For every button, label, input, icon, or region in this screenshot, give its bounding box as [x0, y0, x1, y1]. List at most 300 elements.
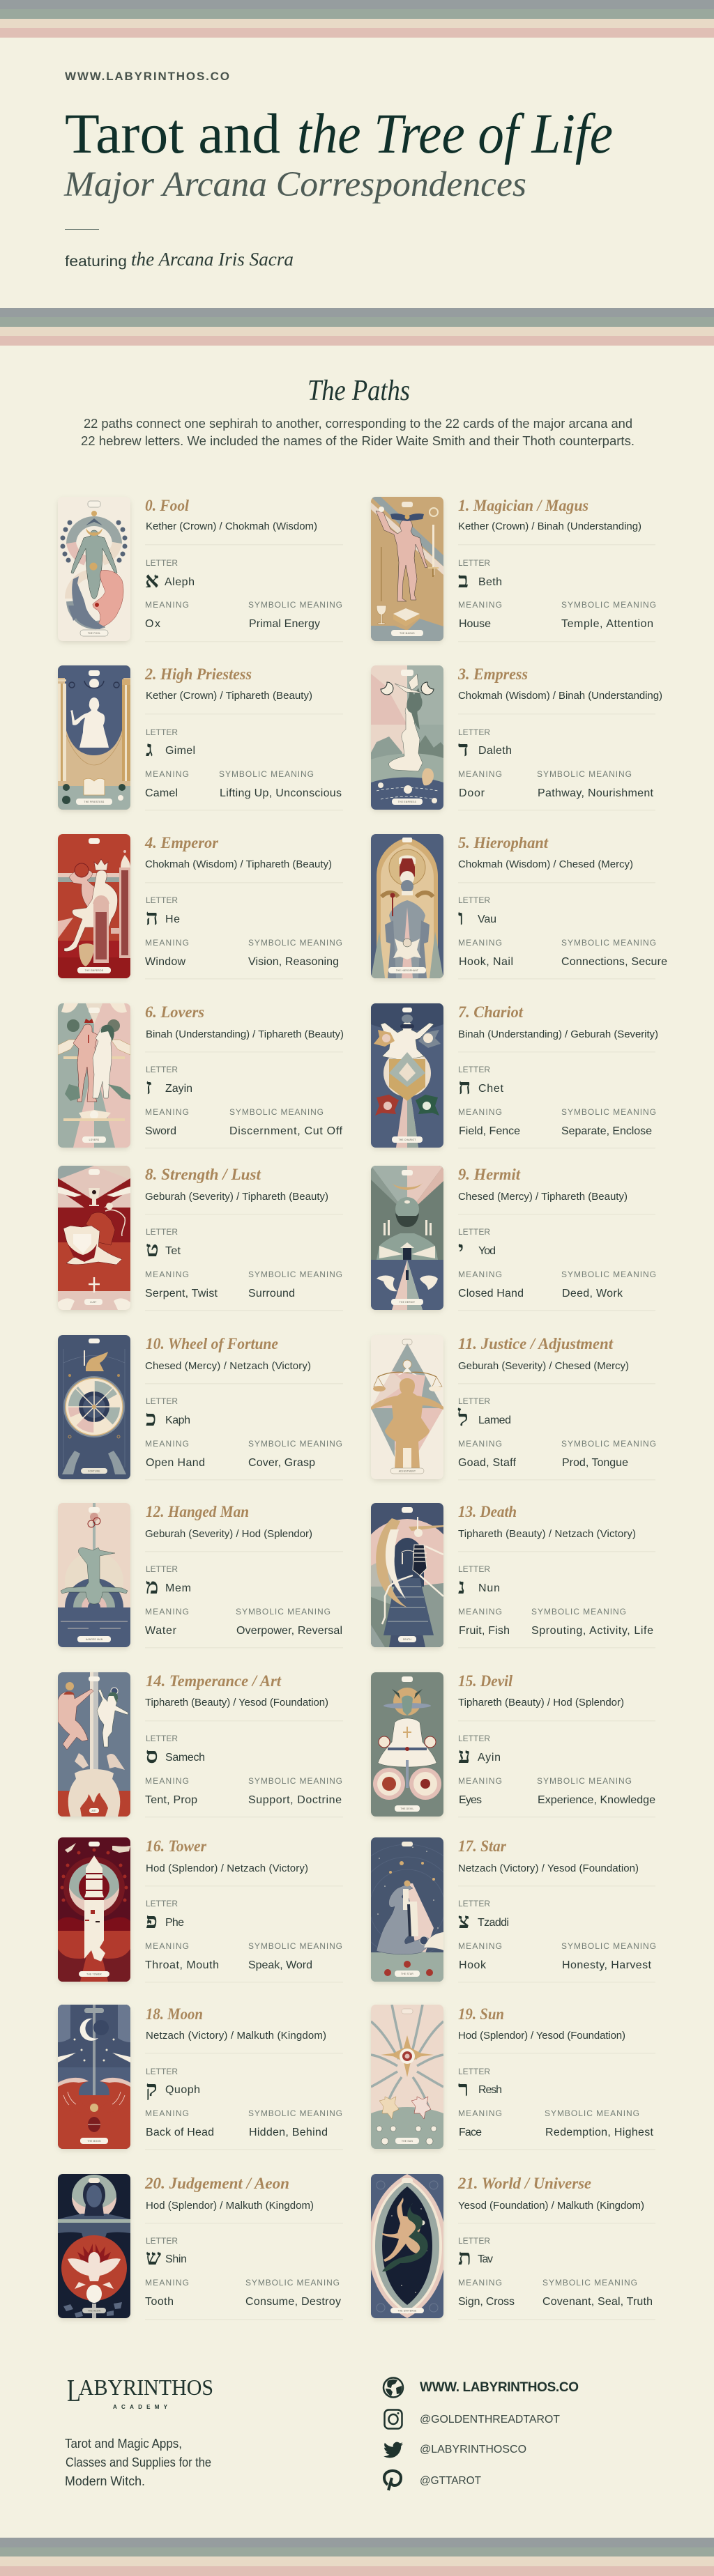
meaning: Ox — [145, 618, 160, 630]
logo: Labyrinthos Academy: L — [67, 2373, 81, 2408]
letter: LETTER — [146, 2236, 178, 2246]
symbolic meaning: SYMBOLIC MEANING — [248, 1439, 342, 1449]
letter: Kaph — [165, 1414, 190, 1426]
sephirot pair: Binah (Understanding) / Tiphareth (Beauty) — [146, 1028, 344, 1040]
symbolic meaning — [248, 1270, 342, 1299]
card title: 10. Wheel of Fortune — [146, 1335, 278, 1352]
symbolic meaning: SYMBOLIC MEANING — [561, 1107, 656, 1117]
intro paragraph — [81, 417, 635, 448]
card art: The Lovers: LOVERS — [89, 1139, 99, 1141]
symbolic meaning: Support, Doctrine — [248, 1794, 342, 1806]
meaning: Door — [459, 787, 485, 799]
letter: ק — [146, 2076, 158, 2101]
panel: 8. Strength / Lust — [58, 1166, 343, 1311]
meaning: MEANING — [145, 2278, 189, 2288]
card title: 21. World / Universe — [457, 2175, 591, 2192]
meaning: Field, Fence — [459, 1125, 520, 1137]
panel: 17. Star — [344, 1837, 656, 1983]
panel: 5. Hierophant — [371, 834, 667, 980]
meaning: MEANING — [145, 1941, 189, 1951]
meaning: Sign, Cross — [458, 2296, 515, 2308]
symbolic meaning: SYMBOLIC MEANING — [248, 1776, 342, 1786]
meaning: Tooth — [145, 2296, 174, 2308]
meaning: MEANING — [458, 2108, 502, 2118]
card title: 2. High Priestess — [144, 665, 252, 683]
meaning: MEANING — [145, 1607, 189, 1617]
card art: The Empress: THE EMPRESS — [398, 801, 416, 803]
letter: צ — [458, 1908, 469, 1933]
symbolic meaning: Consume, Destroy — [245, 2296, 341, 2308]
letter — [146, 1734, 205, 1768]
panel: 3. Empress — [371, 665, 662, 811]
tagline: Tarot and Magic Apps, — [65, 2437, 182, 2451]
meaning: MEANING — [458, 1776, 502, 1786]
card title: 18. Moon — [146, 2005, 203, 2023]
letter: ו — [458, 905, 464, 930]
meaning — [458, 1270, 524, 1299]
letter — [145, 558, 195, 592]
meaning — [458, 1439, 517, 1469]
tagline: Classes and Supplies for the — [66, 2455, 211, 2469]
card art: The Hanged Man: HANGED MAN — [86, 1638, 103, 1641]
meaning — [145, 1107, 189, 1137]
letter: ח — [458, 1074, 471, 1099]
symbolic meaning — [531, 1607, 653, 1637]
letter: LETTER — [146, 1227, 178, 1237]
letter — [146, 1899, 184, 1933]
letter — [457, 1396, 511, 1430]
letter — [458, 2067, 502, 2101]
symbolic meaning: SYMBOLIC MEANING — [561, 1270, 656, 1279]
letter: Daleth — [478, 745, 512, 757]
sephirot pair: Chesed (Mercy) / Tiphareth (Beauty) — [458, 1191, 628, 1203]
letter: כ — [146, 1406, 156, 1430]
letter: LETTER — [458, 1065, 490, 1074]
letter: Tet — [165, 1245, 181, 1257]
symbolic meaning: Discernment, Cut Off — [229, 1125, 343, 1137]
letter: Nun — [478, 1582, 500, 1594]
letter — [146, 895, 180, 930]
card art: The Devil: THE DEVIL — [400, 1807, 414, 1810]
intro paragraph: 22 hebrew letters. We included the names of the Rider Waite Smith and their Thoth counterparts. — [81, 434, 635, 448]
symbolic meaning — [248, 1439, 342, 1469]
card art: The Chariot — [371, 1003, 443, 1149]
meaning: Goad, Staff — [458, 1457, 517, 1469]
card art: The World — [368, 2174, 446, 2320]
card art: The Emperor — [58, 834, 130, 980]
card art: The Emperor: THE EMPEROR — [85, 969, 104, 972]
meaning — [145, 2108, 214, 2138]
meaning: MEANING — [145, 938, 189, 948]
panel: 6. Lovers — [58, 1003, 344, 1149]
meaning: Hook — [459, 1959, 487, 1971]
card art: Temperance — [58, 1672, 130, 1818]
meaning: Face — [459, 2127, 482, 2138]
card title: 4. Emperor — [144, 834, 219, 851]
meaning: Back of Head — [146, 2127, 214, 2138]
letter: ר — [458, 2076, 469, 2101]
meaning: MEANING — [458, 938, 502, 948]
meaning — [145, 769, 189, 799]
letter: LETTER — [458, 2236, 490, 2246]
card art: The Chariot: THE CHARIOT — [399, 1139, 416, 1141]
meaning — [145, 938, 189, 968]
site url: WWW.LABYRINTHOS.CO — [65, 70, 229, 83]
symbolic meaning — [561, 1941, 656, 1971]
symbolic meaning: Pathway, Nourishment — [538, 787, 654, 799]
sephirot pair: Tiphareth (Beauty) / Netzach (Victory) — [458, 1528, 636, 1540]
card art: The Hermit — [371, 1166, 443, 1311]
letter: Yod — [478, 1245, 496, 1257]
card art: The Fool: THE FOOL — [88, 632, 100, 635]
title: the Tree of Life — [297, 102, 613, 165]
meaning: MEANING — [458, 1607, 502, 1617]
card art: The Hanged Man — [58, 1503, 130, 1649]
tagline — [65, 2437, 211, 2488]
symbolic meaning — [245, 2278, 341, 2308]
meaning: MEANING — [145, 1776, 189, 1786]
symbolic meaning — [537, 769, 654, 799]
meaning: MEANING — [145, 600, 189, 610]
sephirot pair: Yesod (Foundation) / Malkuth (Kingdom) — [458, 2200, 644, 2212]
card art: Justice: ADJUSTMENT — [399, 1470, 416, 1473]
sephirot pair: Geburah (Severity) / Hod (Splendor) — [145, 1528, 312, 1540]
card title: 13. Death — [458, 1503, 517, 1520]
symbolic meaning: Speak, Word — [248, 1959, 312, 1971]
meaning: Closed Hand — [458, 1288, 524, 1299]
meaning: Serpent, Twist — [145, 1288, 218, 1299]
letter — [458, 1899, 509, 1933]
symbolic meaning: SYMBOLIC MEANING — [229, 1107, 324, 1117]
symbolic meaning: Temple, Attention — [561, 618, 653, 630]
card art: The Tower — [58, 1837, 130, 1983]
symbolic meaning: SYMBOLIC MEANING — [537, 769, 632, 779]
sephirot pair: Hod (Splendor) / Malkuth (Kingdom) — [146, 2200, 314, 2212]
letter — [458, 727, 512, 761]
meaning: MEANING — [458, 1270, 502, 1279]
letter: LETTER — [458, 1734, 490, 1743]
letter: Tav — [478, 2253, 493, 2265]
letter: LETTER — [458, 1396, 490, 1406]
meaning — [458, 600, 502, 630]
letter: LETTER — [146, 1564, 178, 1574]
letter: ד — [458, 736, 469, 761]
letter: Chet — [478, 1083, 504, 1095]
symbolic meaning: SYMBOLIC MEANING — [561, 938, 656, 948]
sephirot pair: Chokmah (Wisdom) / Chesed (Mercy) — [458, 858, 633, 870]
letter — [146, 1396, 190, 1430]
letter: LETTER — [458, 727, 490, 737]
letter: LETTER — [146, 727, 178, 737]
symbolic meaning — [561, 1107, 656, 1137]
meaning: Hook, Nail — [459, 956, 513, 968]
symbolic meaning: SYMBOLIC MEANING — [236, 1607, 331, 1617]
card art: The Sun: THE SUN — [402, 2140, 413, 2143]
meaning — [145, 1607, 189, 1637]
letter: Lamed — [478, 1414, 511, 1426]
sephirot pair: Hod (Splendor) / Netzach (Victory) — [146, 1862, 308, 1874]
meaning: MEANING — [458, 600, 502, 610]
symbolic meaning: SYMBOLIC MEANING — [248, 938, 342, 948]
letter: LETTER — [146, 895, 178, 905]
card art: The Moon — [58, 2005, 130, 2150]
card art: Death: DEATH — [403, 1638, 411, 1641]
symbolic meaning: Hidden, Behind — [249, 2127, 328, 2138]
card art: Strength — [58, 1166, 130, 1311]
letter — [146, 727, 195, 761]
sephirot pair: Binah (Understanding) / Geburah (Severity) — [458, 1028, 658, 1040]
meaning: Water — [145, 1625, 177, 1637]
card title: 20. Judgement / Aeon — [144, 2175, 289, 2192]
icon: pinterest — [384, 2471, 401, 2490]
letter: Shin — [165, 2253, 187, 2265]
card art: Judgement — [58, 2174, 130, 2320]
meaning: MEANING — [145, 1107, 189, 1117]
symbolic meaning — [561, 600, 656, 630]
symbolic meaning: SYMBOLIC MEANING — [561, 600, 656, 610]
letter: נ — [458, 1574, 465, 1598]
sephirot pair: Chokmah (Wisdom) / Binah (Understanding) — [458, 690, 662, 702]
letter: LETTER — [458, 1227, 490, 1237]
letter: LETTER — [458, 1899, 490, 1908]
letter: מ — [146, 1574, 158, 1598]
letter: ב — [458, 568, 469, 592]
meaning: MEANING — [458, 769, 502, 779]
sephirot pair: Kether (Crown) / Tiphareth (Beauty) — [146, 690, 312, 702]
letter — [458, 558, 502, 592]
symbolic meaning: SYMBOLIC MEANING — [561, 1439, 656, 1449]
meaning: House — [459, 618, 491, 630]
symbolic meaning: Surround — [248, 1288, 295, 1299]
instagram handle: @GOLDENTHREADTAROT — [420, 2414, 560, 2425]
letter: ע — [458, 1743, 471, 1768]
symbolic meaning: SYMBOLIC MEANING — [537, 1776, 632, 1786]
card title: 1. Magician / Magus — [458, 497, 588, 514]
card art: The Magician — [371, 497, 443, 642]
sephirot pair: Geburah (Severity) / Chesed (Mercy) — [458, 1360, 629, 1372]
letter: Quoph — [165, 2084, 200, 2096]
card title: 9. Hermit — [458, 1166, 521, 1183]
logo: Labyrinthos Academy: ABYRINTHOS — [79, 2375, 213, 2400]
meaning — [458, 2108, 502, 2138]
card art: Death — [370, 1503, 445, 1650]
meaning — [145, 600, 189, 630]
letter — [458, 1227, 496, 1261]
website: WWW. LABYRINTHOS.CO — [420, 2380, 579, 2395]
card title: 15. Devil — [458, 1672, 513, 1690]
meaning — [145, 1439, 205, 1469]
meaning — [145, 1270, 218, 1299]
symbolic meaning: Connections, Secure — [561, 956, 667, 968]
card title: 19. Sun — [458, 2005, 504, 2023]
intro paragraph: 22 paths connect one sephirah to another, corresponding to the 22 cards of the major arcana and — [84, 417, 632, 431]
symbolic meaning: SYMBOLIC MEANING — [248, 600, 342, 610]
card art: Wheel of Fortune — [58, 1335, 130, 1481]
card title: 7. Chariot — [458, 1003, 524, 1021]
twitter handle: @LABYRINTHOSCO — [420, 2444, 526, 2455]
symbolic meaning — [537, 1776, 655, 1806]
letter: ט — [146, 1237, 159, 1261]
symbolic meaning: Primal Energy — [249, 618, 320, 630]
symbolic meaning: SYMBOLIC MEANING — [545, 2108, 639, 2118]
symbolic meaning — [542, 2278, 653, 2308]
letter — [146, 1227, 181, 1261]
letter — [458, 2236, 493, 2269]
meaning: MEANING — [458, 1941, 502, 1951]
panel: 19. Sun — [371, 2005, 655, 2150]
meaning: MEANING — [145, 769, 189, 779]
card art: Justice — [371, 1335, 443, 1481]
bottom stripes — [0, 2538, 714, 2576]
card art: The Moon: THE MOON — [87, 2140, 101, 2143]
letter — [146, 2236, 187, 2269]
card art: The Hierophant: THE HIEROPHANT — [396, 969, 418, 972]
letter — [146, 2067, 200, 2101]
letter: LETTER — [458, 895, 490, 905]
letter: LETTER — [146, 558, 178, 568]
letter: Phe — [165, 1917, 184, 1929]
symbolic meaning — [561, 1439, 656, 1469]
panel: 0. Fool — [58, 497, 343, 642]
meaning — [458, 1607, 510, 1637]
letter: Ayin — [478, 1752, 501, 1764]
meaning — [458, 1941, 502, 1971]
card title: 3. Empress — [457, 665, 528, 683]
symbolic meaning: Covenant, Seal, Truth — [542, 2296, 653, 2308]
logo: Labyrinthos Academy — [67, 2373, 213, 2410]
panel: 20. Judgement / Aeon — [58, 2174, 343, 2320]
card title: 11. Justice / Adjustment — [458, 1335, 614, 1352]
meaning: Fruit, Fish — [459, 1625, 510, 1637]
letter: Gimel — [165, 745, 195, 757]
title — [65, 102, 613, 165]
panel: 14. Temperance / Art — [58, 1672, 343, 1818]
card title: 12. Hanged Man — [146, 1503, 249, 1520]
card art: The Devil — [371, 1672, 443, 1818]
letter: פ — [146, 1908, 158, 1933]
letter: LETTER — [146, 1899, 178, 1908]
top stripes — [0, 0, 714, 38]
symbolic meaning: Experience, Knowledge — [538, 1794, 655, 1806]
letter: Samech — [165, 1752, 205, 1764]
card art: The Star — [370, 1837, 445, 1984]
card art: The World: THE UNIVERSE — [397, 2309, 417, 2312]
panel: 21. World / Universe — [368, 2174, 655, 2320]
card art: The Hierophant — [371, 834, 443, 980]
panel: 9. Hermit — [371, 1166, 656, 1311]
sephirot pair: Tiphareth (Beauty) / Hod (Splendor) — [458, 1697, 624, 1709]
sephirot pair: Kether (Crown) / Chokmah (Wisdom) — [146, 520, 317, 532]
symbolic meaning: Cover, Grasp — [248, 1457, 315, 1469]
panel: 10. Wheel of Fortune — [58, 1335, 343, 1481]
sephirot pair: Geburah (Severity) / Tiphareth (Beauty) — [145, 1191, 328, 1203]
symbolic meaning: SYMBOLIC MEANING — [542, 2278, 637, 2288]
symbolic meaning — [219, 769, 342, 799]
letter: ס — [146, 1743, 158, 1768]
meaning: MEANING — [145, 1439, 189, 1449]
panel: 16. Tower — [58, 1837, 343, 1983]
meaning: Open Hand — [146, 1457, 205, 1469]
card art: The High Priestess: THE PRIESTESS — [84, 801, 105, 803]
card art: The Empress — [371, 665, 443, 811]
letter: י — [458, 1237, 464, 1261]
symbolic meaning — [236, 1607, 342, 1637]
panel: 1. Magician / Magus — [371, 497, 656, 642]
panel: 15. Devil — [371, 1672, 655, 1818]
sephirot pair: Netzach (Victory) / Yesod (Foundation) — [458, 1862, 639, 1874]
card art: The Magician: THE MAGUS — [400, 632, 415, 635]
symbolic meaning: SYMBOLIC MEANING — [219, 769, 314, 779]
card art: The Lovers — [58, 1003, 137, 1149]
meaning — [458, 1107, 520, 1137]
meaning — [145, 1776, 197, 1806]
meaning: MEANING — [458, 1439, 502, 1449]
symbolic meaning: SYMBOLIC MEANING — [248, 1941, 342, 1951]
panel: 4. Emperor — [58, 834, 343, 980]
icon: instagram — [385, 2409, 402, 2429]
meaning — [458, 1776, 502, 1806]
subtitle: Major Arcana Correspondences — [63, 165, 526, 204]
letter: ש — [146, 2245, 161, 2269]
featuring line: the Arcana Iris Sacra — [131, 249, 294, 270]
letter: ג — [146, 736, 153, 761]
meaning — [458, 2278, 515, 2308]
symbolic meaning: Redemption, Highest — [545, 2127, 654, 2138]
meaning — [145, 2278, 189, 2308]
panel: 11. Justice / Adjustment — [371, 1335, 656, 1481]
icon: twitter — [383, 2442, 403, 2458]
meaning: Throat, Mouth — [145, 1959, 219, 1971]
symbolic meaning: SYMBOLIC MEANING — [248, 2108, 342, 2118]
card title: 5. Hierophant — [458, 834, 549, 851]
sephirot pair: Chokmah (Wisdom) / Tiphareth (Beauty) — [145, 858, 332, 870]
meaning: Camel — [145, 787, 178, 799]
card title: 8. Strength / Lust — [145, 1166, 261, 1183]
symbolic meaning — [561, 1270, 656, 1299]
symbolic meaning — [545, 2108, 654, 2138]
letter — [458, 895, 496, 930]
symbolic meaning: SYMBOLIC MEANING — [531, 1607, 626, 1617]
symbolic meaning: Vision, Reasoning — [248, 956, 339, 968]
symbolic meaning: Prod, Tongue — [562, 1457, 628, 1469]
card art: Judgement: THE AEON — [88, 2309, 101, 2312]
panel: 13. Death — [357, 1503, 655, 1649]
symbolic meaning: Separate, Enclose — [561, 1125, 652, 1137]
symbolic meaning — [248, 938, 342, 968]
symbolic meaning — [561, 938, 667, 968]
meaning: Sword — [145, 1125, 176, 1137]
letter: Aleph — [165, 576, 195, 588]
panel: 18. Moon — [58, 2005, 343, 2150]
symbolic meaning — [248, 2108, 342, 2138]
letter: Zayin — [165, 1083, 192, 1095]
letter: ת — [458, 2245, 471, 2269]
letter — [146, 1065, 192, 1099]
sephirot pair: Chesed (Mercy) / Netzach (Victory) — [145, 1360, 311, 1372]
meaning: Tent, Prop — [145, 1794, 197, 1806]
card title: 16. Tower — [146, 1837, 207, 1855]
card art: Temperance: ART — [91, 1810, 97, 1812]
symbolic meaning — [248, 1941, 342, 1971]
panel: 2. High Priestess — [58, 665, 343, 811]
sephirot pair: Kether (Crown) / Binah (Understanding) — [458, 520, 641, 532]
meaning: Eyes — [459, 1794, 482, 1806]
letter: LETTER — [458, 1564, 490, 1574]
card art: The Sun — [371, 2005, 443, 2150]
symbolic meaning: SYMBOLIC MEANING — [561, 1941, 656, 1951]
symbolic meaning: Lifting Up, Unconscious — [220, 787, 342, 799]
letter: ה — [146, 905, 158, 930]
